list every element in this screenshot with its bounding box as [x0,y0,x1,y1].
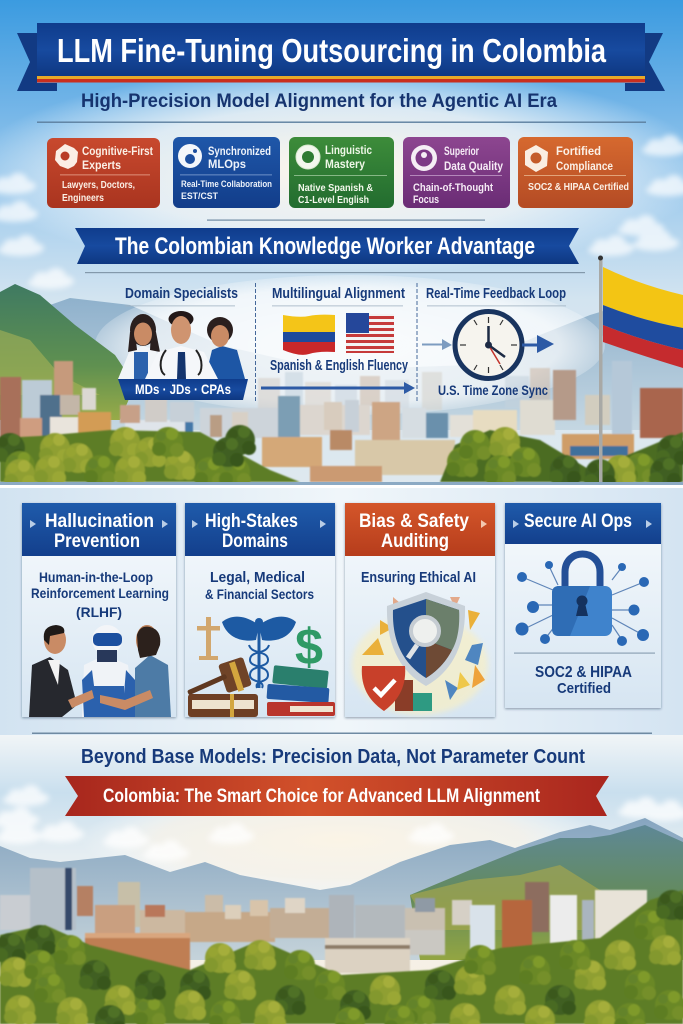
panel: hallucination prevention [22,503,176,717]
illustration: humans and robot [29,625,171,717]
bottom tagline: Beyond Base Models: Precision Data, Not Parameter Count [81,746,585,768]
panel description [535,664,632,697]
panel description [31,569,169,620]
subtitle: High-Precision Model Alignment for the Agentic AI Era [81,91,557,112]
panel description: Legal, Medical [210,569,305,586]
background sky [0,0,683,500]
advantage: real-time feedback loop [422,285,566,398]
card: fortified compliance: Fortified [556,144,601,158]
section banner [75,228,579,264]
bottom landscape [0,732,683,1024]
icon: gavel [187,657,252,695]
panel description: (RLHF) [76,604,122,620]
panel: secure ai ops [505,503,661,708]
feature cards row [47,137,633,208]
arrow: language alignment [261,382,415,394]
card: synchronized mlops: Synchronized [208,144,271,158]
panel description: Human-in-the-Loop [39,569,153,585]
middle treeline [0,425,683,489]
card: superior data quality: Focus [413,194,439,206]
panel description: & Financial Sectors [205,586,314,602]
card: superior data quality: Data Quality [444,159,503,173]
icon: padlock network [516,554,649,646]
banner text: Colombia: The Smart Choice for Advanced LLM Alignment [103,786,541,807]
panel description: Reinforcement Learning [31,585,169,601]
closing red banner [65,776,609,816]
card: cognitive-first experts: Lawyers, Doctors, [62,179,135,191]
panel heading: High-Stakes [205,511,298,532]
card: superior data quality: Superior [444,144,479,158]
middle landscape: mountains and city [0,275,683,482]
card: linguistic mastery [289,137,394,208]
card: synchronized mlops: MLOps [208,157,246,171]
card: fortified compliance: Compliance [556,159,613,173]
card: linguistic mastery: C1-Level English [298,194,369,206]
card: cognitive-first experts: Cognitive-First [82,144,153,158]
advantage: real-time feedback loop: U.S. Time Zone Sync [438,382,548,398]
icon: usa flag [346,313,394,353]
icon: colombia flag [283,315,335,355]
credentials ribbon: MDs · JDs · CPAs [135,381,231,397]
colombian flag on pole [598,256,683,483]
icon: clock [455,312,522,378]
banner text: The Colombian Knowledge Worker Advantage [115,233,535,260]
title banner [17,23,665,91]
card: fortified compliance: SOC2 & HIPAA Certified [528,181,629,193]
card: superior data quality [403,137,510,208]
icon: caduceus [222,617,296,688]
panel heading: Secure AI Ops [524,511,632,532]
card: cognitive-first experts [47,138,160,208]
icon: three professionals [118,311,245,379]
card: cognitive-first experts: Engineers [62,192,104,204]
card: linguistic mastery: Mastery [325,157,365,171]
card: fortified compliance [518,137,633,208]
card: cognitive-first experts: Experts [82,158,121,172]
panel description: SOC2 & HIPAA [535,664,632,681]
panel heading: Domains [222,531,288,552]
icon: book stack [267,665,335,716]
advantage: real-time feedback loop: Real-Time Feedback Loop [426,285,566,302]
card: linguistic mastery: Native Spanish & [298,182,373,194]
panel heading: Prevention [54,531,140,552]
card: superior data quality: Chain-of-Thought [413,182,493,194]
panel description: Certified [557,680,611,697]
advantage: multilingual alignment: Multilingual Alignment [272,285,405,302]
foreground trees [0,890,683,1024]
card: synchronized mlops: Real-Time Collaboration [181,179,272,190]
advantage: domain specialists [118,285,248,400]
icon: left arrow [422,339,452,350]
icon: audit shield [387,592,465,686]
icon: burst shapes [362,597,485,711]
icon: right arrow [522,335,554,353]
panel heading [359,511,487,552]
advantage: domain specialists: Domain Specialists [125,285,238,302]
card: linguistic mastery: Linguistic [325,143,372,157]
panel description: Ensuring Ethical AI [361,570,476,586]
panel heading [30,511,168,552]
panel: high-stakes domains [185,503,335,717]
card: synchronized mlops: EST/CST [181,191,218,202]
panel heading [192,511,326,552]
panel: bias and safety auditing [345,503,495,717]
advantage: multilingual alignment [261,285,415,394]
bottom city skyline [0,868,647,974]
icon: law book [188,694,258,717]
panel heading: Hallucination [45,511,154,532]
panel description [205,569,314,602]
mid section background [0,482,683,737]
icon: dollar sign: $ [295,618,323,675]
panel heading: Bias & Safety [359,511,469,532]
panel heading: Auditing [381,531,449,552]
icon: cross [197,617,220,660]
card: synchronized mlops [173,137,280,208]
advantage: multilingual alignment: Spanish & English Fluency [270,357,408,374]
icon: red check shield [362,666,405,711]
